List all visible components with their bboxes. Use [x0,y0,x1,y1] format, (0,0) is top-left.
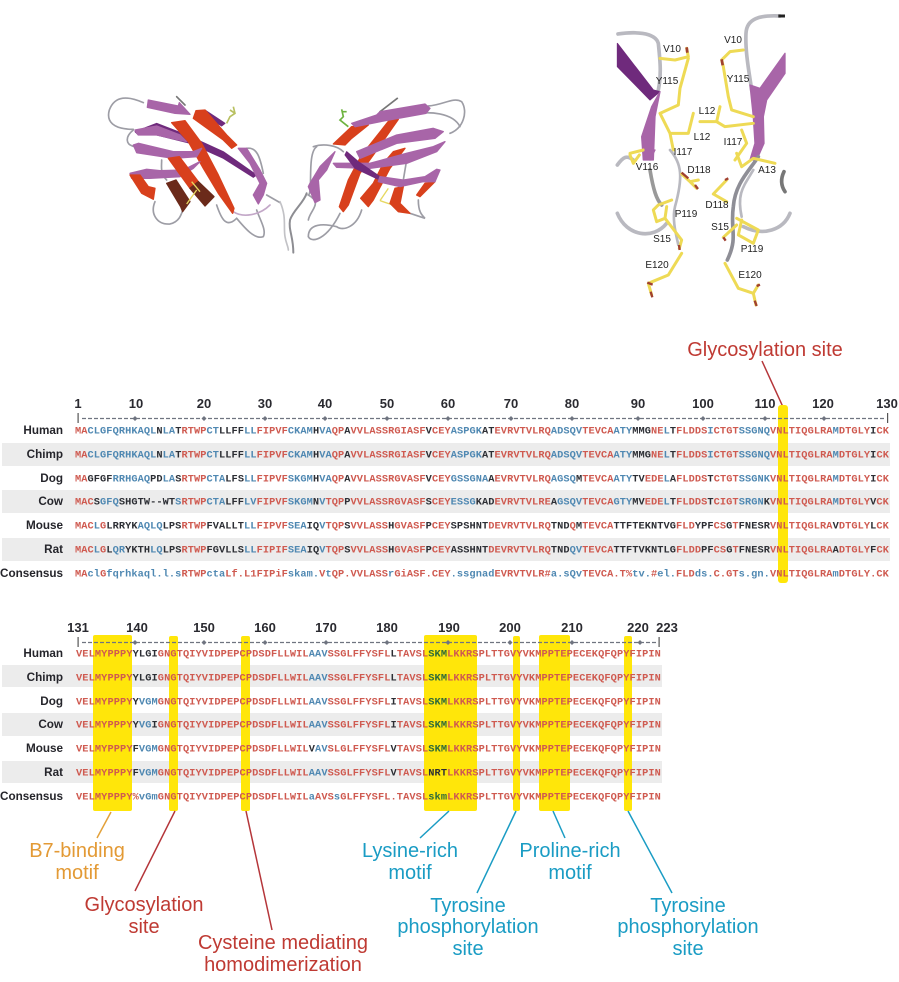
inset: dimer interface close-up [617,16,790,306]
species labels: Human [23,424,63,437]
residue labels: P119 [741,244,764,255]
ruler: positions 1 to 130: 90 [631,396,645,411]
residue labels: S15 [653,234,671,245]
ruler: positions 131 to 223: 131 [67,620,89,635]
callout: tyrosine phosphorylation site, residue 201: site [452,938,484,960]
species labels [0,647,64,803]
callout: proline-rich motif [519,811,621,884]
ruler: positions 1 to 130: 80 [565,396,579,411]
callout: lysine-rich motif: motif [388,862,432,884]
species labels: Chimp [27,671,63,684]
callout: tyrosine phosphorylation site, residue 218: Tyrosine [650,895,726,917]
sequence rows: VELMYPPPYYVGIGNGTQIYVIDPEPCPDSDFLLWILAAVSSGLFFYSFLITAVSLSKMLKKRSPLTTGVYVKMPPTEPECEKQFQPYFIPIN [76,720,661,732]
ruler: positions 1 to 130 [74,396,898,423]
sequence rows: VELMYPPPYYLGIGNGTQIYVIDPEPCPDSDFLLWILAAVSSGLFFYSFLLTAVSLSKMLKKRSPLTTGVYVKMPPTEPECEKQFQPYFIPIN [76,672,661,684]
residue labels: L12 [694,132,711,143]
sequence rows: MACLGFQRHKAQLNLATRTWPCTLLFFLLFIPVFCKAMHVAQPAVVLASSRGIASFVCEYASPGKATEVRVTVLRQADSQVTEVCAATYMMGNELTFLDDSICTGTSSGNQVNLTIQGLRAMDTGLYICK [75,426,890,438]
residue labels: E120 [738,270,762,281]
ruler: positions 1 to 130: 30 [258,396,272,411]
callout: tyrosine phosphorylation site, residue 218: phosphorylation [617,916,759,938]
species labels: Consensus [0,790,63,803]
interface ribbons and side chains, upper part [617,16,785,160]
residue labels [636,35,776,281]
callout: tyrosine phosphorylation site, residue 218 [617,811,759,960]
alignment block: residues 1 to 130 [0,396,898,583]
callout: glycosylation site, top alignment [687,339,843,407]
callout: tyrosine phosphorylation site, residue 218: site [672,938,704,960]
callout: glycosylation site, lower alignment: Glycosylation [85,894,203,916]
ruler: positions 1 to 130: 130 [876,396,898,411]
callout: glycosylation site, lower alignment: site [128,916,160,938]
ruler: positions 1 to 130: 1 [74,396,82,411]
ruler: positions 131 to 223: 210 [561,620,583,635]
species labels: Cow [38,718,64,731]
ruler: positions 131 to 223: 180 [376,620,398,635]
residue labels: V10 [724,35,742,46]
residue labels: A13 [758,165,776,176]
sequence rows: VELMYPPPY%vGmGNGTQIYVIDPEPCPDSDFLLWILaAVSsGLFFYSFL.TAVSLskmLKKRSPLTTGVYVKMPPTEPECEKQFQPYFIPIN [76,792,661,804]
species labels: Dog [40,472,63,485]
residue labels: V10 [663,44,681,55]
callout: proline-rich motif: Proline-rich [519,840,621,862]
sequence rows: MAclGfqrhkaql.l.sRTWPctaLf.L1FIPiFskam.VtQP.VVLASSrGiASF.CEY.ssgnadEVRVTVLR#a.sQvTEVCA.T%tv.#el.FLDds.C.GTs.gn.VNLTIQGLRAmDTGLY.CK [75,568,890,580]
callout: proline-rich motif: motif [548,862,592,884]
callout: lysine-rich motif [362,811,458,884]
species labels: Consensus [0,567,63,580]
species labels: Cow [38,495,64,508]
callout: tyrosine phosphorylation site, residue 201: Tyrosine [430,895,506,917]
ruler: positions 1 to 130: 110 [755,396,775,411]
ruler: positions 1 to 130: 60 [441,396,455,411]
residue labels: I117 [674,147,693,158]
callout: B7-binding motif [29,812,125,884]
ruler: positions 131 to 223: 160 [254,620,276,635]
residue labels: D118 [705,200,729,211]
callout: glycosylation site, lower alignment [85,811,203,938]
residue labels: D118 [687,165,711,176]
sequence rows: MACLGLQRYKTHLQLPSRTWPFGVLLSLLFIPIFSEAIQVTQPSVVLASSHGVASFPCEYASSHNTDEVRVTVLRQTNDQVTEVCATTFTVKNTLGFLDDPFCSGTFNESRVNLTIQGLRAADTGLYFCK [75,544,890,556]
sequence rows: MACSGFQSHGTW--WTSRTWPCTALFFLVFIPVFSKGMNVTQPPVVLASSRGVASFSCEYESSGKADEVRVTVLREAGSQVTEVCAGTYMVEDELTFLDDSTCIGTSRGNKVNLTIQGLRAMDTGLYVCK [75,496,890,508]
ruler: positions 131 to 223: 190 [438,620,460,635]
ruler: positions 131 to 223: 220 [627,620,649,635]
ruler: positions 131 to 223: 223 [656,620,678,635]
callout: lysine-rich motif: Lysine-rich [362,840,458,862]
ruler: positions 131 to 223: 170 [315,620,337,635]
ruler: positions 131 to 223 [67,620,678,647]
sequence rows: VELMYPPPYFVGMGNGTQIYVIDPEPCPDSDFLLWILVAVSLGLFFYSFLVTAVSLSKMLKKRSPLTTGVYVKMPPTEPECEKQFQPYFIPIN [76,744,661,756]
ruler: positions 1 to 130: 50 [380,396,394,411]
species labels: Rat [44,766,63,779]
ruler: positions 1 to 130: 70 [504,396,518,411]
residue labels: Y115 [727,74,750,85]
residue labels: L12 [699,106,716,117]
species labels: Dog [40,695,63,708]
ruler: positions 131 to 223: 140 [126,620,148,635]
residue labels: I117 [724,137,743,148]
residue labels: P119 [675,209,698,220]
interface ribbons and side chains, lower part [617,150,790,306]
callout: cysteine mediating homodimerization: homodimerization [204,954,362,976]
ruler: positions 1 to 130: 20 [197,396,211,411]
ribbon structure: right monomer [280,98,465,253]
species labels [0,424,64,580]
sequence rows: MAGFGFRRHGAQPDLASRTWPCTALFSLLFIPVFSKGMHVAQPAVVLASSRGVASFVCEYGSSGNAAEVRVTVLRQAGSQMTEVCAATYTVEDELAFLDDSTCTGTSSGNKVNLTIQGLRAMDTGLYICK [75,474,890,486]
sequence rows: VELMYPPPYFVGMGNGTQIYVIDPEPCPDSDFLLWILAAVSSGLFFYSFLVTAVSLNRTLKKRSPLTTGVYVKMPPTEPECEKQFQPYFIPIN [76,768,661,780]
residue labels: E120 [645,260,669,271]
callout: B7-binding motif: motif [55,862,99,884]
sequence rows: VELMYPPPYYVGMGNGTQIYVIDPEPCPDSDFLLWILAAVSSGLFFYSFLITAVSLSKMLKKRSPLTTGVYVKMPPTEPECEKQFQPYFIPIN [76,696,661,708]
residue labels: Y115 [656,76,679,87]
callout: cysteine mediating homodimerization: Cysteine mediating [198,932,368,954]
species labels: Human [23,647,63,660]
motif highlights [93,635,632,811]
sequence rows [75,426,890,580]
ruler: positions 1 to 130: 10 [129,396,143,411]
ruler: positions 1 to 130: 120 [812,396,834,411]
species labels: Rat [44,543,63,556]
ruler: positions 1 to 130: 100 [692,396,714,411]
callout: tyrosine phosphorylation site, residue 201 [397,811,539,960]
sequence rows [76,648,661,804]
ruler: positions 131 to 223: 150 [193,620,215,635]
callout: B7-binding motif: B7-binding [29,840,125,862]
residue labels: S15 [711,222,729,233]
ruler: positions 1 to 130: 40 [318,396,332,411]
sequence rows: VELMYPPPYYLGIGNGTQIYVIDPEPCPDSDFLLWILAAVSSGLFFYSFLLTAVSLSKMLKKRSPLTTGVYVKMPPTEPECEKQFQPYFIPIN [76,648,661,660]
species labels: Chimp [27,448,63,461]
residue labels: V116 [636,162,659,173]
ribbon structure: left monomer [109,97,280,237]
callout: cysteine mediating homodimerization [198,811,368,976]
callout: tyrosine phosphorylation site, residue 201: phosphorylation [397,916,539,938]
ruler: positions 131 to 223: 200 [499,620,521,635]
alignment block: residues 131 to 223 [0,620,678,811]
species labels: Mouse [26,742,63,755]
sequence rows: MACLGFQRHKAQLNLATRTWPCTLLFFLLFIPVFCKAMHVAQPAVVLASSRGIASFVCEYASPGKATEVRVTVLRQADSQVTEVCAATYMMGNELTFLDDSICTGTSSGNQVNLTIQGLRAMDTGLYICK [75,450,890,462]
sequence rows: MACLGLRRYKAQLQLPSRTWPFVALLTLLFIPVFSEAIQVTQPSVVLASSHGVASFPCEYSPSHNTDEVRVTVLRQTNDQMTEVCATTFTEKNTVGFLDYPFCSGTFNESRVNLTIQGLRAVDTGLYLCK [75,520,890,532]
callout: glycosylation site, top alignment: Glycosylation site [687,339,843,361]
species labels: Mouse [26,519,63,532]
